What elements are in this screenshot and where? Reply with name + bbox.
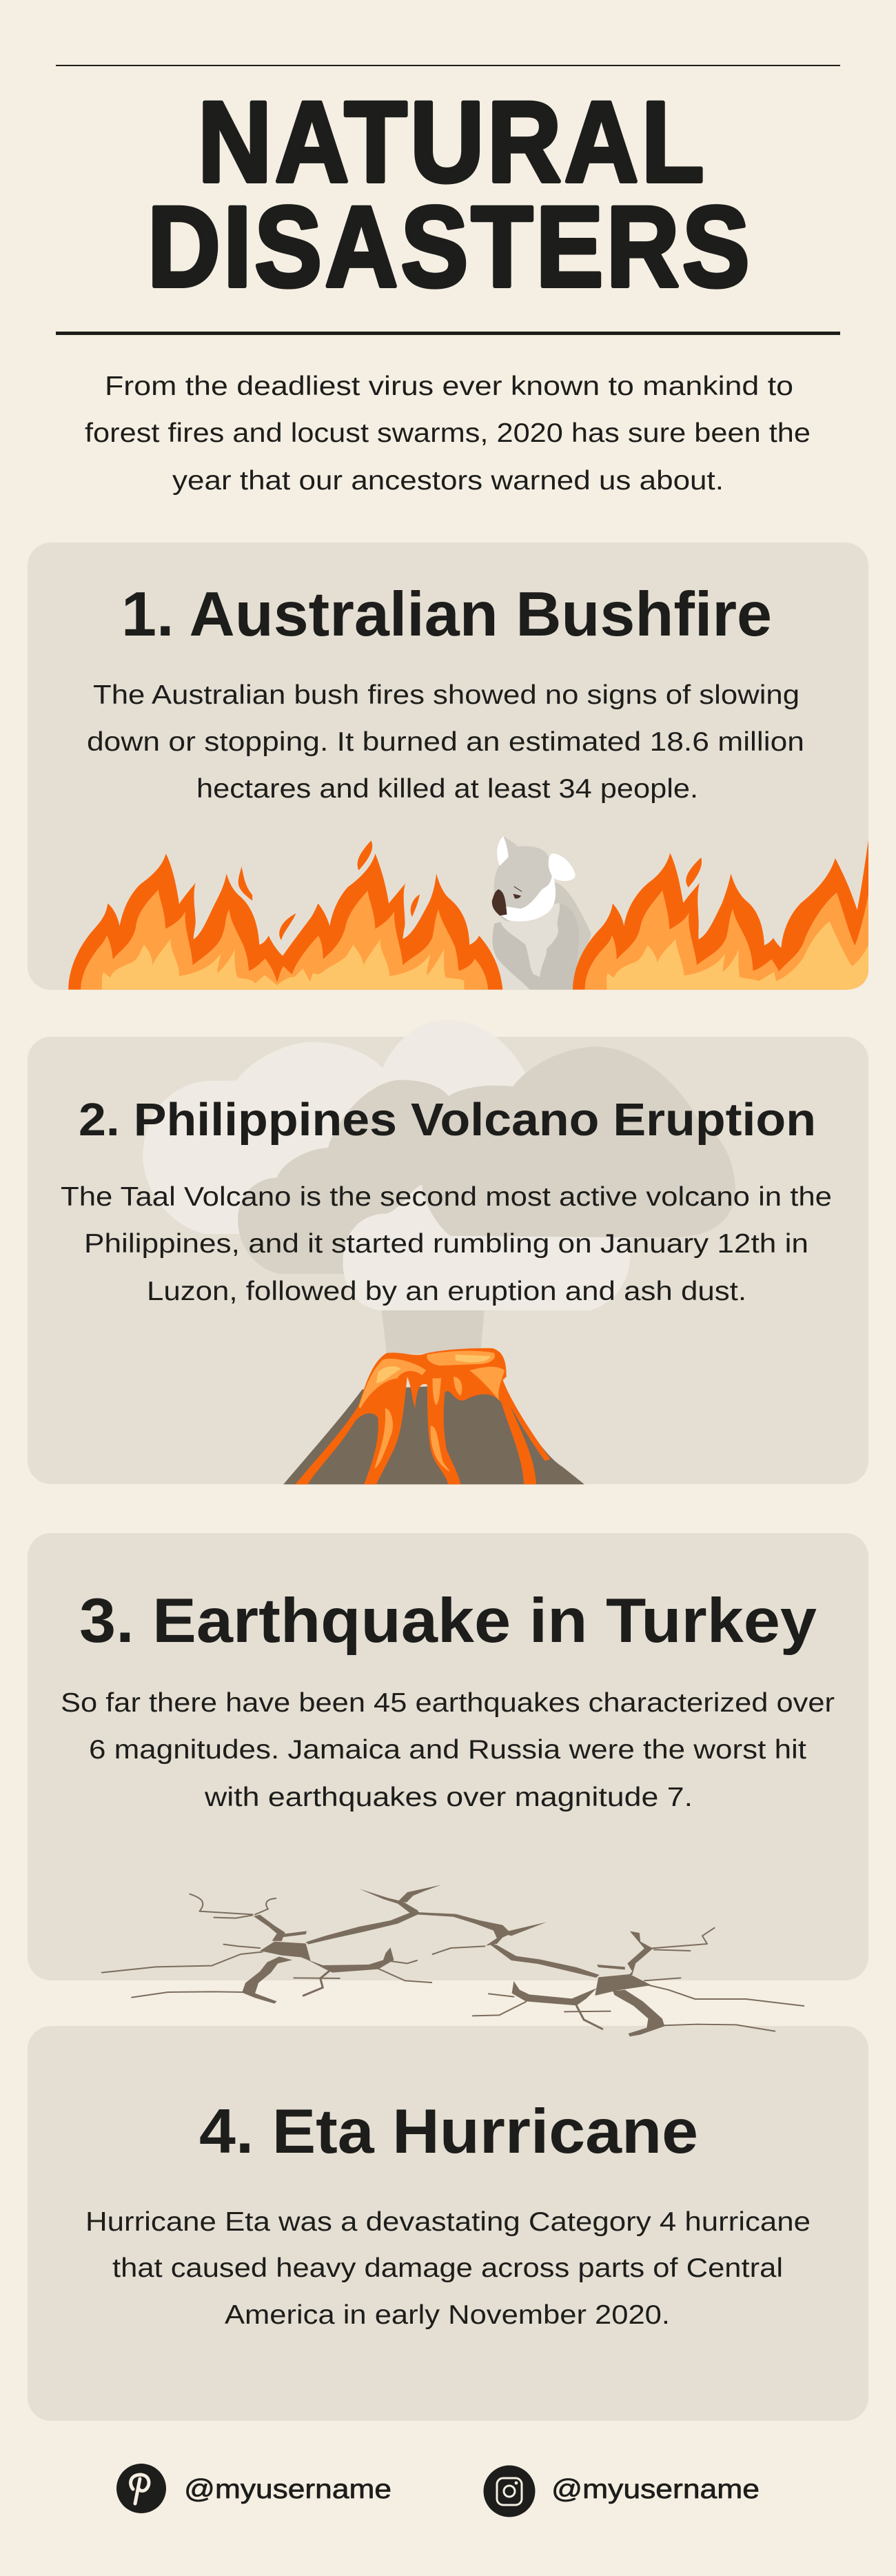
- icon: Instagram: [484, 2465, 535, 2517]
- body text: earthquake: So far there have been 45 earthquakes characterized over: [61, 1688, 835, 1718]
- icon: right flames: [573, 840, 868, 990]
- footer: Pinterest handle: [116, 2464, 391, 2513]
- panel: Eta hurricane: [28, 2026, 868, 2421]
- body text: bushfire: hectares and killed at least 34 people.: [196, 774, 698, 804]
- panel: earthquake in Turkey: [28, 1533, 868, 1980]
- footer: Instagram handle: @myusername: [551, 2475, 760, 2504]
- body text: earthquake: with earthquakes over magnitude 7.: [204, 1783, 693, 1812]
- panel: Australian bushfire: [28, 542, 868, 990]
- body text: volcano: Philippines, and it started rumbling on January 12th in: [84, 1229, 808, 1259]
- footer: Pinterest handle: @myusername: [184, 2475, 391, 2504]
- icon: volcano: [283, 1348, 584, 1484]
- title: [147, 79, 753, 311]
- intro text: year that our ancestors warned us about.: [172, 466, 724, 496]
- body text: volcano: The Taal Volcano is the second most active volcano in the: [61, 1182, 832, 1212]
- heading: volcano: 2. Philippines Volcano Eruption: [79, 1094, 816, 1146]
- body text: bushfire: [87, 680, 804, 804]
- intro text: From the deadliest virus ever known to mankind to: [105, 372, 793, 401]
- panel: Philippines volcano eruption: [28, 1020, 868, 1484]
- icon: Pinterest: [116, 2464, 166, 2513]
- body text: earthquake: [61, 1688, 835, 1812]
- icon: ground cracks: [102, 1885, 804, 2036]
- body text: volcano: [61, 1182, 832, 1306]
- title: DISASTERS: [147, 183, 753, 311]
- intro text: [85, 372, 811, 496]
- heading: bushfire: 1. Australian Bushfire: [121, 580, 772, 649]
- title: NATURAL: [198, 79, 707, 206]
- icon: koala: [492, 836, 591, 990]
- body text: hurricane: America in early November 2020.: [225, 2300, 670, 2330]
- heading: hurricane: 4. Eta Hurricane: [199, 2097, 698, 2167]
- body text: hurricane: that caused heavy damage across parts of Central: [112, 2253, 783, 2283]
- body text: earthquake: 6 magnitudes. Jamaica and Russia were the worst hit: [89, 1735, 806, 1765]
- body text: bushfire: down or stopping. It burned an estimated 18.6 million: [87, 727, 804, 757]
- body text: volcano: Luzon, followed by an eruption and ash dust.: [147, 1277, 746, 1306]
- body text: hurricane: [85, 2207, 811, 2330]
- body text: hurricane: Hurricane Eta was a devastating Category 4 hurricane: [85, 2207, 811, 2237]
- heading: earthquake: 3. Earthquake in Turkey: [79, 1586, 817, 1656]
- intro text: forest fires and locust swarms, 2020 has sure been the: [85, 418, 811, 448]
- body text: bushfire: The Australian bush fires showed no signs of slowing: [93, 680, 800, 710]
- icon: ash cloud: [143, 1020, 735, 1355]
- icon: left flames: [68, 840, 502, 990]
- footer: Instagram handle: [484, 2465, 760, 2517]
